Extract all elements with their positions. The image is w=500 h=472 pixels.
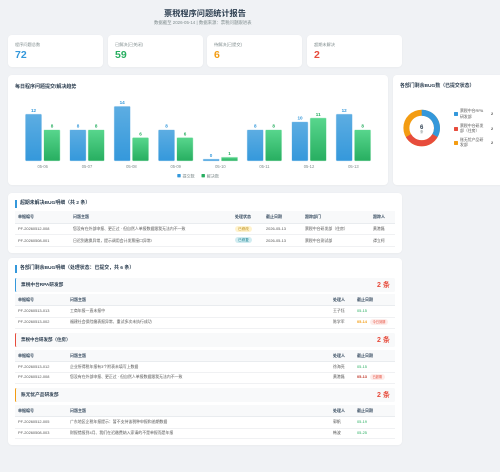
overdue table: 处理状态 [235,214,251,219]
legend: housing dept: 2 [491,126,493,131]
bar chart: daily submitted and resolved: 8 [272,124,275,128]
stat card: resolved [108,35,202,67]
department group: product: PF-20260512-005 [18,419,49,424]
legend: product dept [454,136,493,147]
legend: product dept: 2 [491,140,493,145]
donut chart [403,110,440,146]
department group: housing: 05-13 [357,374,367,379]
panel: remaining bug details [8,258,402,445]
bar chart: daily submitted and resolved: 10 [297,116,303,120]
department group: product: 郭帆 [333,419,341,424]
department group: housing [15,333,395,384]
overdue table: 您没有在外部申报、更正过 · 但自然人单报数据跟我无法内不一致 [73,226,185,231]
department group: RPA: 陈学军 [333,319,345,324]
stat card: resolved: 59 [115,49,127,61]
bar chart: daily submitted and resolved: 8 [77,124,80,128]
bar chart: daily submitted and resolved: 05-08 [126,164,137,169]
bar chart: daily submitted and resolved: 12 [31,108,36,113]
department group: RPA: 票税中台RPA研发部 [21,282,63,287]
legend: RPA dept [454,108,493,119]
donut heading: 各部门剩余BUG数（已提交状态） [400,84,474,88]
overdue table: 已修复 [238,238,249,242]
overdue table: 截止日期 [266,214,282,219]
department group: product: 05-25 [357,430,367,435]
overdue table [15,214,395,247]
donut chart: 6 [420,125,424,131]
stat card: pending [207,35,302,67]
department group: RPA: 今日到期 [373,320,385,324]
department group: housing: PF-20260512-008 [18,374,49,379]
department group: housing: 2 条 [377,336,390,344]
overdue table: 2026-05-13 [266,226,286,231]
bar chart: daily submitted and resolved: 05-11 [259,164,270,169]
department group: RPA: 福建社会保险缴表报异常、重试多次未执行成功 [70,319,152,324]
department group: product: 2 条 [377,392,390,398]
overdue table: 黄港磊 [373,226,385,231]
department group: housing: 单据编号 [18,352,34,358]
department group: RPA: 单据编号 [18,297,34,302]
department group: housing: 票税中台研发部（住房） [21,337,70,342]
stat card: overdue [307,35,402,67]
chart heading: 每日程序问题提交/解决趋势 [15,84,76,90]
legend: product dept: 发部 [460,142,468,147]
department group: housing: 已超期 [372,375,382,379]
department group: RPA: 王子钰 [333,308,345,313]
stat card: overdue: 2 [314,49,320,61]
bar chart: daily submitted and resolved: 8 [254,124,257,128]
bar chart: daily submitted and resolved: 05-13 [348,164,359,169]
title: 票税程序问题统计报告 [164,9,246,18]
stat card: pending: 6 [214,49,220,61]
department group: housing: 企业所得税年报有3个附表未填写上数据 [70,364,138,369]
remaining section heading: 各部门剩余BUG明细（处理状态：已提交，共 6 条） [20,266,134,271]
legend: RPA dept: 研发部 [460,114,472,119]
bar chart: daily submitted and resolved: 05-06 [37,164,49,169]
stat card: total issues: 程序问题总数 [15,42,40,46]
bar chart: daily submitted and resolved: 05-09 [170,164,182,169]
bar chart: daily submitted and resolved: 11 [316,112,321,117]
bar chart: daily submitted and resolved: 05-10 [215,164,226,169]
department group: housing: PF-20260513-012 [18,364,49,369]
stat card: pending: 待解决(已提交) [214,42,242,46]
department group: RPA: 工商年报一直未报中 [70,308,105,313]
overdue table: 跟踪人 [373,214,385,219]
department group: product: 账无忧产品研发部 [21,392,59,397]
department group: RPA: 05-14 [357,319,367,324]
department group: RPA: 处理人 [333,297,345,302]
bar chart: daily submitted and resolved: 8 [95,124,98,128]
overdue table: 票税中台测试部 [305,238,332,242]
subtitle: 数据截至 2026-05-14 | 数据来源：票税问题跟进表 [154,20,252,25]
stat card: resolved: 已解决(已关闭) [115,42,143,46]
bar chart: daily submitted and resolved: 8 [51,124,54,128]
department group: product: 处理人 [333,408,345,413]
overdue section heading: 超期未解决BUG明细（共 2 条） [20,201,90,206]
overdue table: 票税中台研发部（住房） [305,226,348,231]
department group: RPA: PF-20260513-002 [18,319,49,324]
legend: RPA dept: 2 [491,111,493,116]
department group: product: 05-19 [357,419,367,424]
bar chart: daily submitted and resolved: 提交数 [182,172,195,178]
department group: housing: 黄港磊 [333,374,345,379]
bar chart: daily submitted and resolved: 8 [165,124,168,128]
bar chart: daily submitted and resolved: 12 [342,108,347,113]
legend: housing dept [454,122,493,133]
stat card: total issues: 72 [15,49,27,61]
department group: product: PF-20260508-003 [18,430,49,435]
panel: overdue bug details [8,193,402,253]
panel: daily trend chart [8,75,388,185]
overdue table: 单据编号 [18,214,34,219]
bar chart: daily submitted and resolved: 解决数 [207,172,219,178]
department group: housing: 问题主题 [70,352,86,358]
bar chart: daily submitted and resolved [25,100,371,178]
department group: product: 截止日期 [357,408,373,413]
bar chart: daily submitted and resolved: 6 [139,132,142,136]
overdue table: 2026-05-13 [266,238,286,242]
bar chart: daily submitted and resolved: 8 [361,124,364,128]
department group: RPA [15,278,395,329]
overdue table: 问题主题 [73,214,89,219]
department group: product: 问题主题 [70,408,86,413]
bar chart: daily submitted and resolved: 1 [228,151,231,156]
bar chart: daily submitted and resolved: 6 [184,132,187,136]
department group: product [15,388,395,439]
legend: housing dept: 部（住房） [460,128,479,133]
legend: product dept: 账无忧产品研 [460,136,483,142]
department group: housing: 截止日期 [357,352,373,358]
department group: RPA: 05-15 [357,308,367,313]
bar chart: daily submitted and resolved: 14 [120,100,125,105]
overdue table: 谭立柯 [373,238,385,242]
department group: product: 单据编号 [18,408,34,413]
bar chart: daily submitted and resolved: 05-12 [304,164,315,169]
department group: housing: 徐海亮 [333,364,345,369]
legend: housing dept: 票税中台研发 [460,122,483,128]
department group: housing: 05-15 [357,364,367,369]
stat card: total issues [8,35,103,67]
stat card: overdue: 超期未解决 [314,42,335,46]
department group: RPA: 截止日期 [357,297,373,302]
donut chart: 条 [420,129,424,134]
department group: product: 韩波 [333,430,341,435]
legend: RPA dept: 票税中台RPA [460,108,483,113]
overdue table: 跟踪部门 [305,214,321,219]
overdue table: 日迟到邀换异常，提示调用会计发票接口异常! [73,238,152,242]
panel: remaining bugs per department [393,75,500,185]
department group: product: 广东地区企税年报提示：暂不支持该税种申报和逾期数据 [70,419,167,424]
department group: RPA: 问题主题 [70,297,86,302]
department group: product: 财报错报到4月、我们在迟缴费纳入家请的不是单报而是年报 [70,430,173,435]
department group: RPA: PF-20260513-013 [18,308,49,313]
overdue table: 已修改 [238,226,249,230]
bar chart: daily submitted and resolved: 05-07 [82,164,93,169]
overdue table: PF-20260508-001 [18,238,49,242]
department group: housing: 处理人 [333,352,345,358]
bar chart: daily submitted and resolved: 0 [210,153,213,158]
department group: housing: 您没有在外部申报、更正过 · 但自然人单报数据跟我无法内不一致 [70,374,182,379]
department group: RPA: 2 条 [377,282,390,288]
overdue table: PF-20260512-008 [18,226,49,231]
